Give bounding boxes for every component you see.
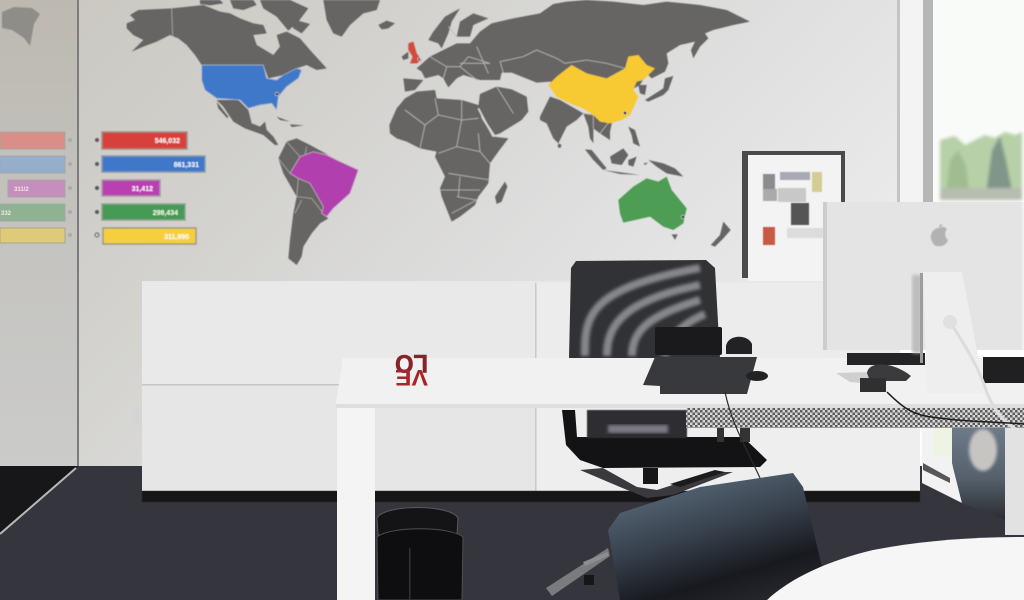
- Old world: [389, 0, 750, 247]
- floor carpet: [0, 466, 1024, 600]
- LOVE sculpture: LO: [395, 349, 428, 377]
- data bars legend: [95, 132, 205, 244]
- mouse pad: [836, 372, 872, 384]
- New Zealand and Tasmania: [672, 222, 731, 247]
- desk top: [336, 358, 1024, 408]
- South America: [278, 138, 328, 265]
- Arctic islands: [200, 0, 310, 33]
- Mexico and Central America: [217, 100, 304, 145]
- Brazil highlighted: [290, 152, 358, 217]
- mouse: [867, 364, 911, 381]
- picture frame: [742, 151, 845, 281]
- LOVE sculpture: VE: [395, 365, 428, 390]
- Ireland: [402, 52, 408, 60]
- Russia and northern Asia: [470, 0, 750, 100]
- bar: United Kingdom: 546,032: [155, 138, 180, 145]
- reflected data bars: [0, 132, 72, 243]
- Middle East: [478, 87, 528, 135]
- perforated modesty panel: [686, 408, 1024, 428]
- Red Sea gap: [478, 108, 493, 137]
- Africa: [389, 90, 508, 222]
- bar: United States: 861,331: [174, 162, 199, 169]
- LOVE sculpture: [395, 349, 428, 390]
- Indonesia, Philippines and New Guinea: [585, 127, 683, 177]
- waste bins: [377, 508, 463, 600]
- round table: [767, 537, 1024, 600]
- trees outside: [940, 132, 1022, 200]
- bar: Australia: 298,434: [153, 210, 178, 217]
- wall socket: [132, 406, 142, 424]
- world map: [127, 0, 750, 265]
- Madagascar: [495, 182, 507, 204]
- China highlighted: [548, 55, 655, 123]
- map location pins: [275, 58, 685, 219]
- reflected data bars: 311/2: [14, 187, 29, 193]
- keyboard and speaker: [847, 353, 925, 365]
- office wall: [0, 0, 900, 470]
- Canada and USA border line: [171, 8, 174, 37]
- bar: Brazil: 31,412: [132, 186, 153, 193]
- Japan and Korea: [638, 76, 673, 102]
- Sri Lanka: [558, 143, 562, 148]
- United States highlighted: [202, 65, 302, 110]
- apple logo: [931, 224, 948, 246]
- desk leg: [337, 408, 375, 600]
- Continental Europe: [417, 43, 493, 87]
- stand shadow: [912, 275, 922, 353]
- Australia highlighted: [618, 177, 687, 230]
- poster collage: [763, 172, 823, 245]
- desk phone: [643, 327, 768, 478]
- window: [897, 0, 1024, 202]
- country borders: [405, 27, 625, 213]
- reflected map fragment: [2, 7, 40, 46]
- front chair: [546, 473, 822, 600]
- poster with child: [952, 428, 1005, 520]
- office chair behind desk: [562, 260, 767, 498]
- chair mesh back: [569, 260, 720, 358]
- Iberia: [403, 78, 423, 92]
- window lower and poster: [922, 428, 1024, 535]
- South America borders: [278, 142, 323, 213]
- monitor stand: [923, 272, 985, 393]
- bar: China: 311,990: [164, 234, 189, 241]
- Alaska and Canada: [127, 5, 327, 78]
- cables: [950, 322, 1024, 433]
- Southeast Asia: [583, 113, 613, 143]
- Scandinavia: [428, 8, 488, 48]
- reflected data bars: 332: [1, 211, 12, 217]
- India: [540, 97, 583, 143]
- United Kingdom highlighted: [408, 42, 422, 63]
- chair seat and base: [562, 410, 767, 498]
- white storage cabinets: [142, 281, 920, 502]
- Americas: [127, 0, 395, 265]
- Greenland and Iceland: [323, 0, 395, 37]
- glass side panel: [0, 0, 79, 467]
- desk: [336, 358, 1024, 600]
- monitor: [823, 202, 1024, 433]
